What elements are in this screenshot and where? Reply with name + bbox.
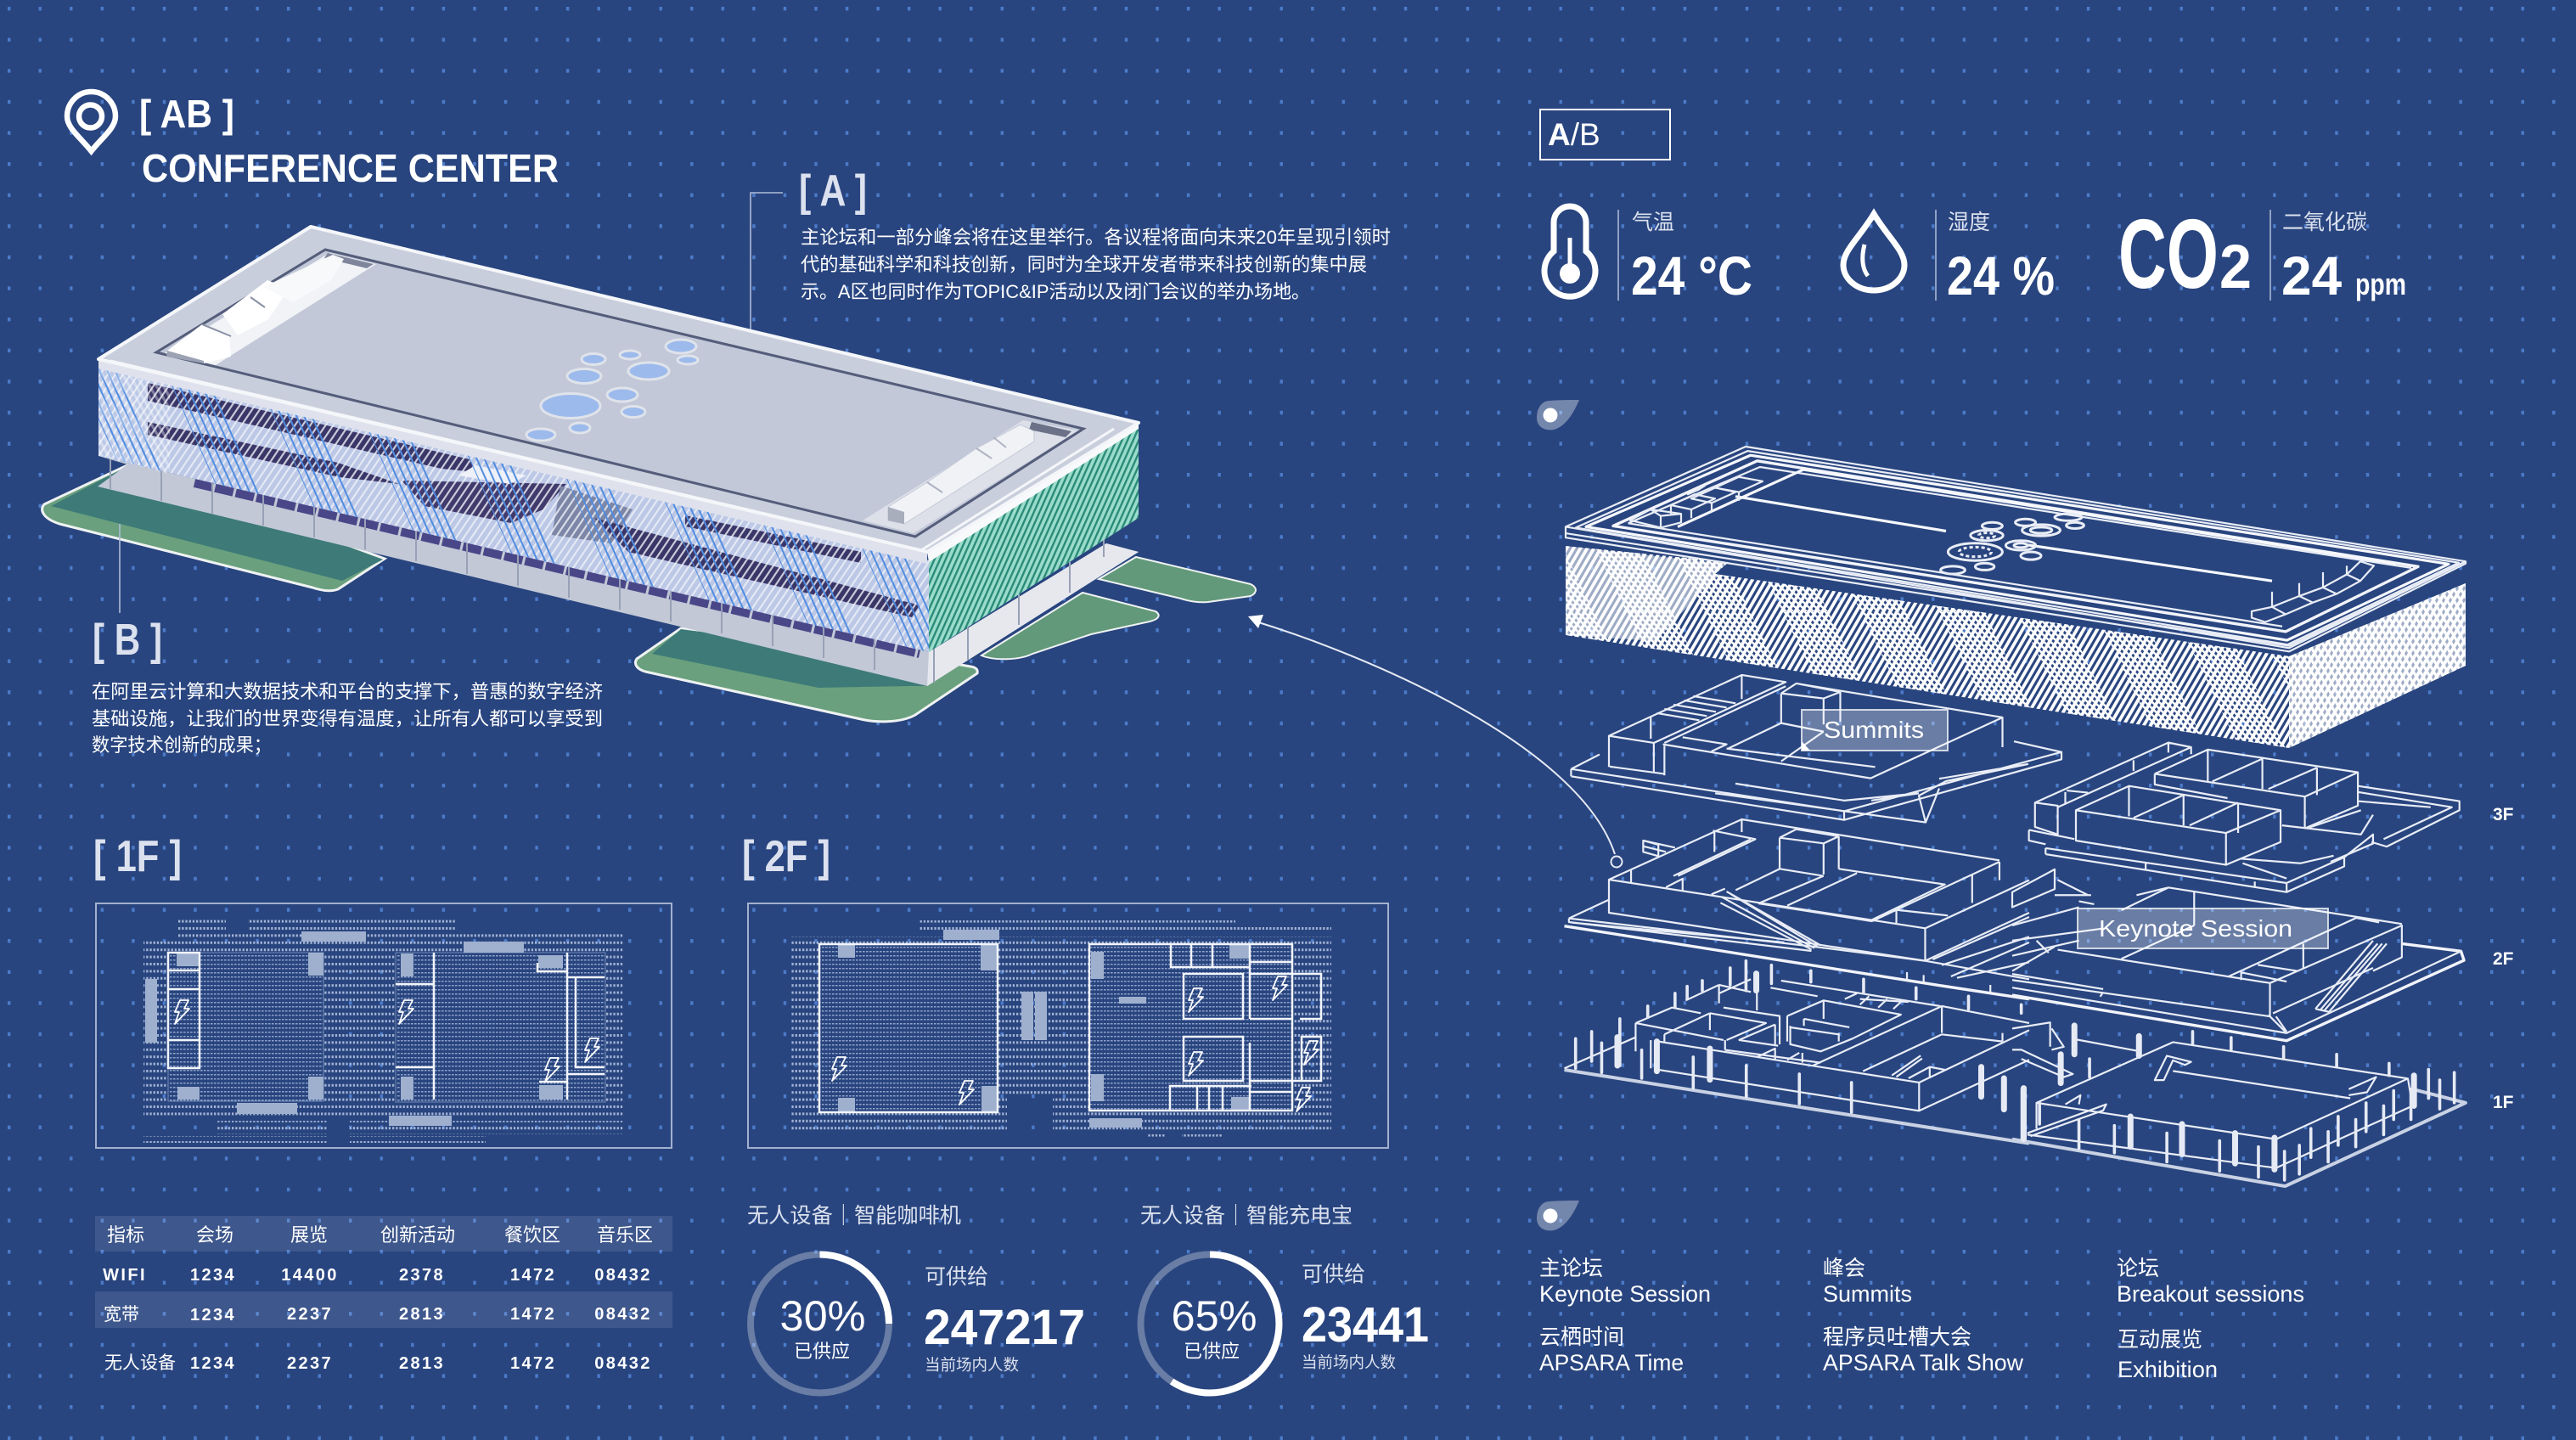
text: B description: 在阿里云计算和大数据技术和平台的支撑下，普惠的数字经济 — [92, 681, 603, 702]
stat: CO2: 二氧化碳 — [2282, 211, 2367, 234]
stat: 23441: 当前场内人数 — [1302, 1353, 1396, 1371]
label: Summits: Summits — [1824, 717, 1924, 743]
rooftop equipment: left — [165, 253, 376, 365]
icon: CO2: 2 — [2219, 233, 2252, 301]
arrow: building to exploded view — [1248, 615, 1622, 868]
table row: 无人设备: 1234 — [190, 1354, 236, 1373]
lawn: bottom — [635, 628, 977, 722]
stat: humidity — [1936, 210, 2055, 307]
lightning icons — [832, 976, 1319, 1111]
stat: 23441: 23441 — [1302, 1297, 1429, 1353]
label: A: [ A ] — [799, 166, 867, 216]
stat: 247217: 247217 — [924, 1300, 1085, 1355]
table header: 展览 — [290, 1224, 328, 1246]
table row: 宽带: 宽带 — [104, 1305, 139, 1325]
stat: temperature: 气温 — [1632, 211, 1674, 234]
donut: 65%: 65% — [1172, 1292, 1257, 1340]
heading: power bank: 无人设备｜智能充电宝 — [1140, 1204, 1353, 1228]
legend: Exhibition — [2118, 1357, 2218, 1382]
donut: 65% — [1141, 1255, 1279, 1392]
floor labels: 1F — [2493, 1093, 2514, 1112]
title — [139, 92, 559, 190]
stat: CO2 — [2270, 210, 2406, 307]
table header: 音乐区 — [597, 1224, 653, 1246]
text: B description: 数字技术创新的成果； — [92, 734, 272, 756]
text: B description — [92, 681, 603, 756]
lawn: left — [42, 464, 385, 591]
facade: short side — [929, 427, 1139, 652]
table — [95, 1216, 672, 1373]
floor 3: left block — [1571, 675, 2061, 823]
table row: WIFI: 1472 — [510, 1266, 556, 1285]
text: A description — [801, 227, 1391, 302]
legend: APSARA Talk Show — [1823, 1350, 2024, 1375]
legend: Breakout sessions — [2117, 1281, 2304, 1307]
icon: CO2: CO — [2118, 199, 2219, 309]
label: Summits — [1802, 710, 1948, 751]
legend: APSARA Time — [1539, 1350, 1684, 1375]
roof slab — [98, 227, 1139, 564]
table header — [107, 1224, 653, 1246]
stat: 23441 — [1302, 1263, 1429, 1371]
solid blocks — [838, 930, 1250, 1128]
rooftop equipment: right — [863, 420, 1078, 533]
stat: humidity: 24 % — [1947, 245, 2055, 307]
walls — [819, 944, 1321, 1112]
table row: 无人设备: 08432 — [594, 1354, 652, 1373]
legend: 论坛 — [2117, 1257, 2159, 1280]
text: A description: 主论坛和一部分峰会将在这里举行。各议程将面向未来20年呈现引领时 — [801, 227, 1391, 248]
rooftop skylights — [1941, 514, 2084, 574]
stat: temperature — [1618, 210, 1752, 307]
table row: 无人设备 — [104, 1353, 652, 1373]
lawn: middle right — [981, 593, 1159, 659]
text: A description: 代的基础科学和科技创新，同时为全球开发者带来科技创新的集中展 — [801, 254, 1367, 275]
floor 2: left block — [1564, 819, 2029, 999]
stat: CO2: ppm — [2355, 267, 2406, 301]
stat: 23441: 可供给 — [1302, 1263, 1365, 1286]
floor plan: 1F — [96, 903, 672, 1148]
legend: Keynote Session — [1539, 1281, 1711, 1307]
table row: WIFI: 08432 — [594, 1266, 652, 1285]
icon: humidity drop — [1843, 214, 1904, 290]
facade: long side — [98, 363, 929, 652]
floor labels: 2F — [2493, 949, 2514, 969]
legend: 互动展览 — [2118, 1328, 2202, 1352]
table header: 会场 — [196, 1224, 233, 1246]
table row: WIFI: 2378 — [399, 1266, 445, 1285]
label: Keynote Session — [2078, 908, 2328, 948]
donut: 30%: 已供应 — [794, 1341, 850, 1362]
title: [ AB ] — [139, 92, 234, 136]
table row: WIFI: WIFI — [103, 1266, 147, 1285]
table row: WIFI — [103, 1266, 652, 1285]
donut: 65%: 已供应 — [1184, 1341, 1240, 1362]
walls — [168, 953, 605, 1100]
legend — [1539, 1257, 2304, 1382]
ground platform — [98, 456, 1139, 686]
table row: 宽带: 2813 — [399, 1305, 445, 1324]
table row: 无人设备: 2237 — [287, 1354, 333, 1373]
text: A description: 示。A区也同时作为TOPIC&IP活动以及闭门会议的举办场地。 — [801, 281, 1310, 302]
label: Keynote Session: Keynote Session — [2099, 915, 2292, 942]
table row: WIFI: 14400 — [281, 1266, 339, 1285]
badge: A/B — [1540, 110, 1670, 160]
badge: A/B: A/B — [1548, 117, 1600, 152]
facade hatch — [1566, 546, 2466, 748]
floor 2: right block — [2012, 869, 2464, 1041]
legend: Summits — [1823, 1281, 1912, 1307]
skylights — [526, 340, 698, 441]
connector: B — [119, 524, 121, 613]
floor labels — [2493, 805, 2514, 1112]
legend: 主论坛 — [1539, 1257, 1603, 1280]
floor labels: 3F — [2493, 805, 2514, 824]
table row: WIFI: 1234 — [190, 1266, 236, 1285]
floor 3: right block — [2029, 743, 2460, 892]
floor plan: 2F — [748, 903, 1388, 1148]
legend: 云栖时间 — [1539, 1325, 1624, 1349]
connector: A — [751, 193, 783, 331]
lightning icons — [175, 1000, 599, 1082]
floor 1: right block — [2012, 1022, 2466, 1186]
heading: 2F: [ 2F ] — [742, 832, 830, 881]
donut: 30% — [751, 1255, 889, 1392]
text: B description: 基础设施，让我们的世界变得有温度，让所有人都可以享受到 — [92, 708, 603, 729]
table row: 宽带: 2237 — [287, 1305, 333, 1324]
table row: 宽带: 1472 — [510, 1305, 556, 1324]
label: B: [ B ] — [93, 616, 162, 665]
solid blocks — [145, 931, 563, 1126]
icon: thermometer — [1544, 206, 1595, 296]
heading: 1F: [ 1F ] — [93, 832, 182, 881]
floor 1: left block — [1564, 961, 2029, 1144]
lawn: right — [1099, 557, 1256, 602]
stat: 247217: 可供给 — [925, 1265, 988, 1289]
legend: 程序员吐槽大会 — [1823, 1325, 1971, 1349]
stat: humidity: 湿度 — [1948, 211, 1990, 234]
stat: CO2: 24 — [2281, 245, 2343, 307]
exploded diagram — [1528, 447, 2514, 1186]
icon: section marker — [1537, 400, 1579, 430]
stat: 247217: 当前场内人数 — [925, 1356, 1019, 1374]
heading: coffee machine: 无人设备｜智能咖啡机 — [747, 1204, 961, 1228]
columns — [1576, 961, 2024, 1139]
table header: 创新活动 — [380, 1224, 455, 1246]
table row: 无人设备: 2813 — [399, 1354, 445, 1373]
icon: section marker — [1537, 1201, 1579, 1230]
stat: 247217 — [924, 1265, 1085, 1374]
purple base strip — [194, 483, 920, 654]
title: CONFERENCE CENTER — [142, 146, 559, 190]
roof wireframe — [1566, 447, 2466, 651]
table header: 指标 — [107, 1224, 144, 1246]
stat: temperature: 24 °C — [1631, 245, 1752, 307]
donut: 30%: 30% — [779, 1292, 866, 1340]
table row: 宽带 — [104, 1305, 652, 1325]
icon: location pin — [67, 92, 115, 151]
table row: 宽带: 08432 — [594, 1305, 652, 1324]
building illustration — [42, 227, 1256, 722]
table row: 无人设备: 1472 — [510, 1354, 556, 1373]
table row: 无人设备: 无人设备 — [104, 1353, 176, 1373]
table row: 宽带: 1234 — [190, 1306, 236, 1325]
legend: 峰会 — [1823, 1257, 1865, 1280]
columns — [110, 458, 1104, 683]
table header: 餐饮区 — [504, 1224, 560, 1246]
